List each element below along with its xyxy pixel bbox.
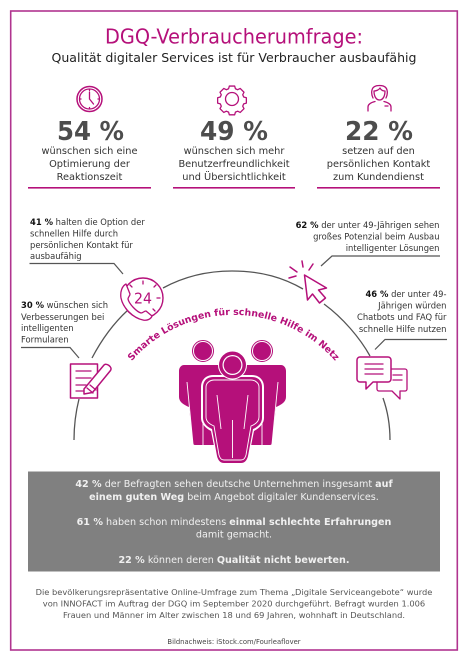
text: 41 percent: ausbaufähig (30, 251, 82, 261)
text: 30 percent: intelligenten (21, 323, 74, 333)
callout: 62 percent (296, 220, 440, 266)
text: 49 percent description: und Übersichtlichkeit (182, 170, 286, 183)
text: 42 percent: einem guten Weg beim Angebot digitaler Kundenservices. (89, 492, 379, 503)
text: 22 percent description: persönlichen Kontakt (327, 159, 430, 170)
text: methodology: von INNOFACT im Auftrag der DGQ im September 2020 durchgeführt. Befragt wurden 1.006 (43, 598, 425, 608)
text: methodology: Frauen und Männer im Alter zwischen 18 und 69 Jahren, wohnhaft in Deutschland. (63, 610, 405, 620)
text: 62 percent: großes Potenzial beim Ausbau (313, 232, 440, 242)
text: image credit: Bildnachweis: iStock.com/Fourleaflover (167, 638, 301, 646)
rule: 49 percent (173, 187, 295, 189)
text: 41 percent: schnellen Hilfe durch (30, 228, 118, 238)
text: 46 percent: 46 % der unter 49- (365, 289, 446, 299)
icon: phone 24: 24 (134, 290, 152, 308)
text: 41 percent: persönlichen Kontakt für (30, 240, 133, 250)
arc (74, 271, 390, 440)
person: back right (239, 340, 286, 445)
text: 49 percent description: Benutzerfreundlichkeit (178, 159, 290, 170)
text: 30 percent: Formularen (21, 334, 69, 344)
text: 61 percent: 61 % haben schon mindestens einmal schlechte Erfahrungen (77, 517, 391, 528)
leader line: 41 percent (30, 264, 123, 274)
icon: chat bubbles (357, 357, 407, 399)
leader line: 46 percent (375, 340, 447, 350)
text: 46 percent: Jährigen würden (377, 300, 446, 310)
icon: group of people (179, 340, 286, 465)
text: 54 percent description: Reaktionszeit (57, 172, 122, 183)
person: back left (179, 340, 226, 445)
subtitle: Qualität digitaler Services ist für Verbraucher ausbaufähig (52, 51, 416, 65)
panel: 49 percent (173, 86, 295, 189)
text: 22 percent description: zum Kundendienst (333, 172, 424, 183)
text: 46 percent: schnelle Hilfe nutzen (359, 324, 446, 334)
callout: 46 percent (357, 289, 447, 350)
stat: 22 %: 22 % (345, 117, 413, 147)
leader line: 62 percent (321, 256, 440, 266)
curved heading: Smarte Lösungen für schnelle Hilfe im Netz (128, 308, 339, 361)
text: 30 percent: 30 % wünschen sich (21, 300, 108, 310)
panel: 54 percent (28, 86, 151, 189)
text: 54 percent description: wünschen sich eine (41, 146, 138, 157)
text: 22 percent description: setzen auf den (342, 146, 415, 157)
text: methodology: Die bevölkerungsrepräsentative Online-Umfrage zum Thema „Digitale Serviceangebote“ wurde (36, 587, 432, 597)
text: 46 percent: Chatbots und FAQ für (357, 312, 447, 322)
person: front (201, 350, 264, 465)
callout: 30 percent (21, 300, 108, 358)
rule: 54 percent (28, 187, 151, 189)
rule: 22 percent (317, 187, 440, 189)
panel: summary (28, 472, 440, 572)
text: 22 percent: 22 % können deren Qualität nicht bewerten. (118, 555, 350, 566)
title: DGQ-Verbraucherumfrage: (105, 24, 363, 48)
icon: phone 24 (121, 278, 163, 320)
icon: form and pencil (70, 364, 111, 398)
stat: 54 %: 54 % (57, 117, 124, 147)
icon: support agent (368, 86, 391, 111)
background (28, 472, 440, 572)
text: 61 percent: damit gemacht. (196, 530, 272, 540)
leader line: 30 percent (21, 348, 79, 358)
text: 41 percent: 41 % halten die Option der (30, 217, 145, 227)
icon: cursor click (289, 261, 326, 303)
callout: 41 percent (30, 217, 145, 274)
text: 42 percent: 42 % der Befragten sehen deutsche Unternehmen insgesamt auf (75, 479, 393, 490)
text: 54 percent description: Optimierung der (49, 159, 131, 170)
text: 62 percent: intelligenter Lösungen (346, 243, 440, 253)
panel: 22 percent (317, 86, 440, 189)
stat: 49 %: 49 % (200, 117, 268, 147)
text: 30 percent: Verbesserungen bei (21, 312, 104, 322)
text: 49 percent description: wünschen sich mehr (184, 146, 285, 157)
icon: gear (218, 86, 246, 115)
icon: clock (77, 86, 102, 112)
text: 62 percent: 62 % der unter 49-Jährigen sehen (296, 220, 440, 230)
